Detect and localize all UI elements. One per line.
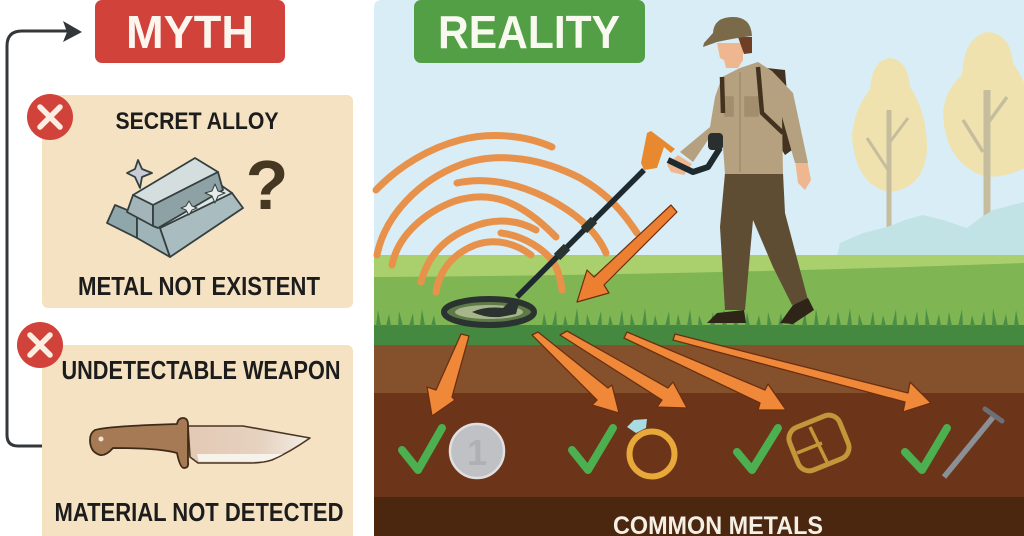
arrows: coil to finds bbox=[427, 331, 931, 416]
front hand bbox=[667, 155, 692, 175]
legs bbox=[720, 173, 808, 310]
heading: MYTH bbox=[95, 0, 285, 63]
detector shaft bbox=[517, 170, 644, 297]
icon: red cross 1 bbox=[27, 94, 73, 140]
text: metal not existent: METAL NOT EXISTENT bbox=[78, 271, 320, 301]
grass strip bbox=[374, 325, 1024, 345]
grass field bbox=[374, 255, 1024, 345]
icon: signal waves bbox=[376, 136, 637, 292]
icon: knife bbox=[90, 418, 310, 468]
trees bbox=[837, 32, 1024, 258]
boots bbox=[707, 310, 746, 323]
icon: check 2 bbox=[572, 428, 613, 470]
soil layers bbox=[374, 345, 1024, 393]
arrow: to coil bbox=[577, 205, 677, 302]
shaft joints bbox=[557, 220, 594, 257]
panel: secret alloy bbox=[42, 95, 353, 308]
jacket bbox=[680, 62, 808, 174]
detector coil bbox=[444, 299, 534, 325]
arrow: to ring bbox=[532, 332, 619, 413]
arrow: to coin bbox=[427, 334, 469, 416]
detector grip bbox=[668, 148, 720, 172]
middle soil bbox=[374, 393, 1024, 497]
heading: MYTH: MYTH bbox=[126, 6, 254, 58]
arrow: to nail bbox=[673, 334, 931, 412]
grip box bbox=[708, 133, 723, 150]
deep soil bbox=[374, 497, 1024, 536]
grass tufts bbox=[376, 308, 1019, 326]
backpack straps bbox=[722, 67, 783, 133]
icon: coin bbox=[450, 424, 504, 478]
icon: question mark: ? bbox=[246, 146, 288, 224]
neck and head bbox=[717, 43, 743, 68]
right boot bbox=[780, 298, 814, 324]
coil hub bbox=[472, 301, 519, 317]
jacket details bbox=[725, 72, 758, 172]
illustration: person with metal detector bbox=[444, 17, 814, 325]
arrow: loop from weapon back to myth bbox=[7, 21, 82, 446]
sky bbox=[374, 0, 1024, 270]
arrow: to next bbox=[560, 331, 687, 408]
arrow: to buckle bbox=[624, 332, 786, 410]
panel: undetectable weapon bbox=[42, 345, 353, 536]
darker grass bbox=[374, 263, 1024, 345]
icon: red cross 2 bbox=[17, 322, 63, 368]
back hand bbox=[795, 160, 811, 190]
backpack bbox=[758, 67, 792, 155]
heading: undetectable weapon: UNDETECTABLE WEAPON bbox=[62, 355, 340, 385]
hair bbox=[738, 37, 752, 54]
heading: secret alloy: SECRET ALLOY bbox=[116, 108, 278, 135]
panel: reality scene bbox=[374, 0, 1024, 536]
icon: coin: 1 bbox=[467, 432, 487, 473]
cap bbox=[703, 17, 752, 47]
heading: REALITY: REALITY bbox=[438, 6, 620, 58]
icon: check 4 bbox=[905, 428, 947, 470]
text: material not detected: MATERIAL NOT DETECTED bbox=[54, 497, 344, 527]
icon: check 3 bbox=[737, 428, 778, 470]
detector head bbox=[641, 131, 675, 170]
icon: gold ring bbox=[627, 419, 674, 476]
icon: belt buckle bbox=[785, 412, 853, 474]
icon: check 1 bbox=[402, 428, 442, 470]
icon: nail bbox=[944, 409, 1002, 477]
coil inner bbox=[455, 305, 523, 319]
icon: silver ingots bbox=[107, 158, 243, 257]
